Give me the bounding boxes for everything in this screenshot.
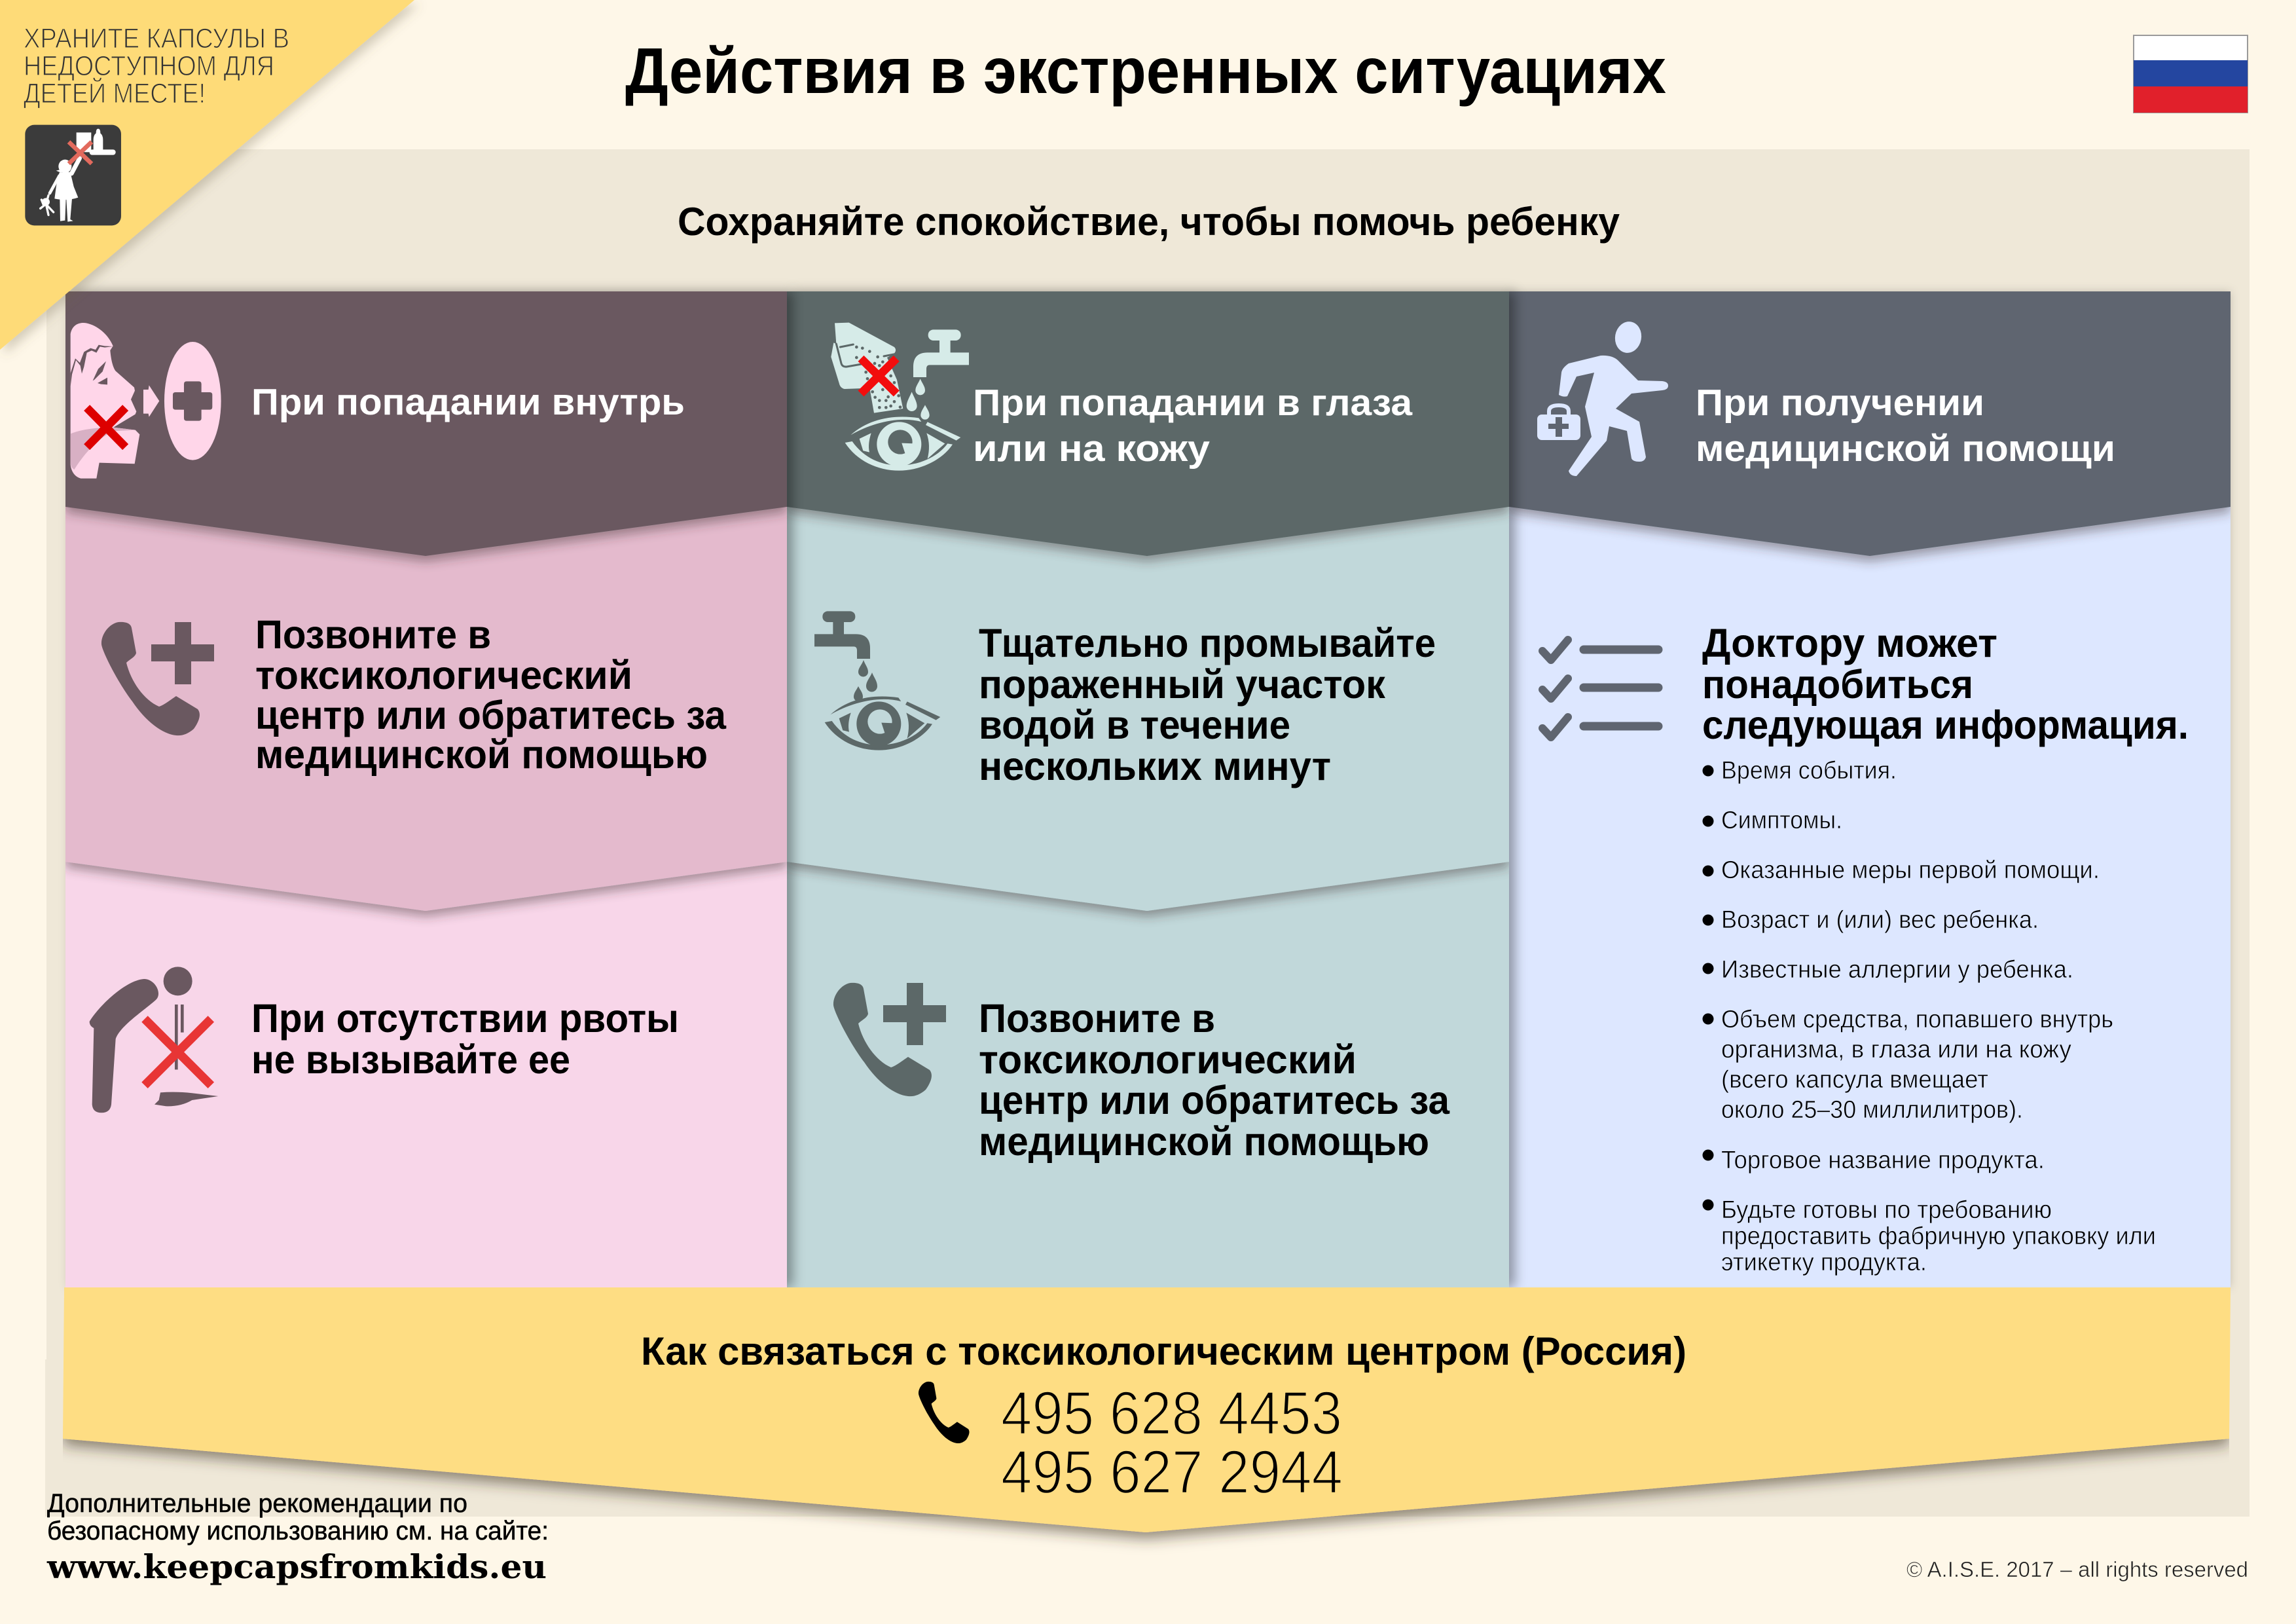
phone numbers: 495 627 2944 <box>1001 1437 1343 1506</box>
header: ingestion <box>65 291 787 556</box>
text: call poison centre: Позвоните в <box>255 612 491 657</box>
text: call poison centre: токсикологический <box>255 653 632 697</box>
heading: doctor may need: следующая информация. <box>1702 703 2189 747</box>
text: additional recommendations: Дополнительные рекомендации по <box>47 1489 467 1518</box>
list: information for the doctor: Оказанные меры первой помощи. <box>1721 857 2100 884</box>
icon: capsule, tap and eye <box>831 323 969 471</box>
text: rinse thoroughly <box>979 621 1436 788</box>
heading: eyes or skin: При попадании в глаза <box>973 382 1413 424</box>
list: information for the doctor: этикетку продукта. <box>1721 1249 1927 1276</box>
icon: Russian flag <box>2134 35 2248 113</box>
text: rinse thoroughly: Тщательно промывайте <box>979 621 1436 665</box>
heading: doctor may need: Доктору может <box>1702 621 1997 665</box>
icon: phone with cross <box>101 622 214 735</box>
text: store capsules out of reach <box>24 23 289 109</box>
text: rinse thoroughly: нескольких минут <box>979 744 1331 788</box>
list: information for the doctor: Объем средства, попавшего внутрь <box>1721 1006 2113 1033</box>
panel: ingestion column <box>65 291 787 1287</box>
heading: doctor may need <box>1702 621 2189 747</box>
subtitle: Сохраняйте спокойствие, чтобы помочь ребенку <box>678 200 1620 244</box>
text: store capsules out of reach: ДЕТЕЙ МЕСТЕ! <box>24 77 206 109</box>
panel: medical help column <box>1509 291 2231 1287</box>
list: information for the doctor: предоставить фабричную упаковку или <box>1721 1223 2156 1250</box>
text: call poison centre: центр или обратитесь за <box>255 693 727 737</box>
list: information for the doctor: Известные аллергии у ребенка. <box>1721 956 2073 984</box>
heading: doctor may need: понадобиться <box>1702 662 1973 707</box>
heading: contact poison centre: Как связаться с токсикологическим центром (Россия) <box>641 1329 1686 1373</box>
banner: poison centre contacts <box>63 1287 2231 1532</box>
step chevron: call <box>65 507 787 911</box>
heading: eyes or skin: или на кожу <box>973 428 1210 470</box>
icon: phone <box>919 1382 970 1443</box>
header: eyes or skin <box>787 291 1509 556</box>
heading: medical help: медицинской помощи <box>1696 428 2115 470</box>
text: call poison centre: токсикологический <box>979 1037 1357 1082</box>
list: information for the doctor <box>1702 757 2156 1276</box>
phone numbers <box>1001 1378 1343 1506</box>
text: rinse thoroughly: водой в течение <box>979 703 1290 747</box>
list: information for the doctor: организма, в глаза или на кожу <box>1721 1036 2071 1063</box>
icon: phone with cross <box>833 983 946 1096</box>
text: call poison centre <box>255 612 727 777</box>
text: do not induce vomiting: При отсутствии рвоты <box>251 996 679 1041</box>
text: do not induce vomiting: не вызывайте ее <box>251 1037 570 1082</box>
header: medical help <box>1509 291 2231 556</box>
list: information for the doctor: Симптомы. <box>1721 807 1842 834</box>
heading: medical help: При получении <box>1696 382 1984 424</box>
icon: rinsing eye under tap <box>814 611 940 750</box>
heading: ingestion: При попадании внутрь <box>251 381 685 423</box>
list: information for the doctor: Будьте готовы по требованию <box>1721 1196 2052 1224</box>
text: additional recommendations <box>46 1489 549 1586</box>
list: information for the doctor: Время события. <box>1721 757 1897 784</box>
heading: eyes or skin <box>973 382 1413 470</box>
website link: www.keepcapsfromkids.eu <box>46 1547 547 1586</box>
icon: checklist <box>1542 640 1658 737</box>
icon: face with cross, arrow and medicine <box>71 323 221 479</box>
list: information for the doctor: (всего капсула вмещает <box>1721 1066 1988 1094</box>
text: store capsules out of reach: ХРАНИТЕ КАПСУЛЫ В <box>24 23 289 54</box>
text: rinse thoroughly: пораженный участок <box>979 662 1385 707</box>
copyright: © A.I.S.E. 2017 – all rights reserved <box>1906 1557 2248 1581</box>
phone numbers: 495 628 4453 <box>1001 1378 1342 1447</box>
text: call poison centre: медицинской помощью <box>979 1119 1429 1164</box>
text: additional recommendations: безопасному использованию см. на сайте: <box>47 1517 549 1545</box>
heading: medical help <box>1696 382 2115 470</box>
title: Действия в экстренных ситуациях <box>625 35 1666 107</box>
text: call poison centre: Позвоните в <box>979 996 1215 1041</box>
list: information for the doctor: Возраст и (или) вес ребенка. <box>1721 906 2039 934</box>
text: do not induce vomiting <box>251 996 679 1082</box>
step chevron: rinse <box>787 862 1509 923</box>
corner banner: keep out of reach <box>0 0 414 350</box>
list: information for the doctor: около 25–30 миллилитров). <box>1721 1096 2023 1124</box>
icon: vomiting person crossed out <box>90 967 218 1113</box>
panel: eyes or skin column <box>787 291 1509 1287</box>
icon: child reaching shelf <box>25 125 121 225</box>
text: call poison centre <box>979 996 1450 1164</box>
list: information for the doctor: Торговое название продукта. <box>1721 1147 2045 1174</box>
icon: running man with first aid case <box>1537 320 1668 476</box>
text: call poison centre: медицинской помощью <box>255 732 708 777</box>
text: store capsules out of reach: НЕДОСТУПНОМ ДЛЯ <box>24 50 274 82</box>
text: call poison centre: центр или обратитесь за <box>979 1078 1450 1122</box>
